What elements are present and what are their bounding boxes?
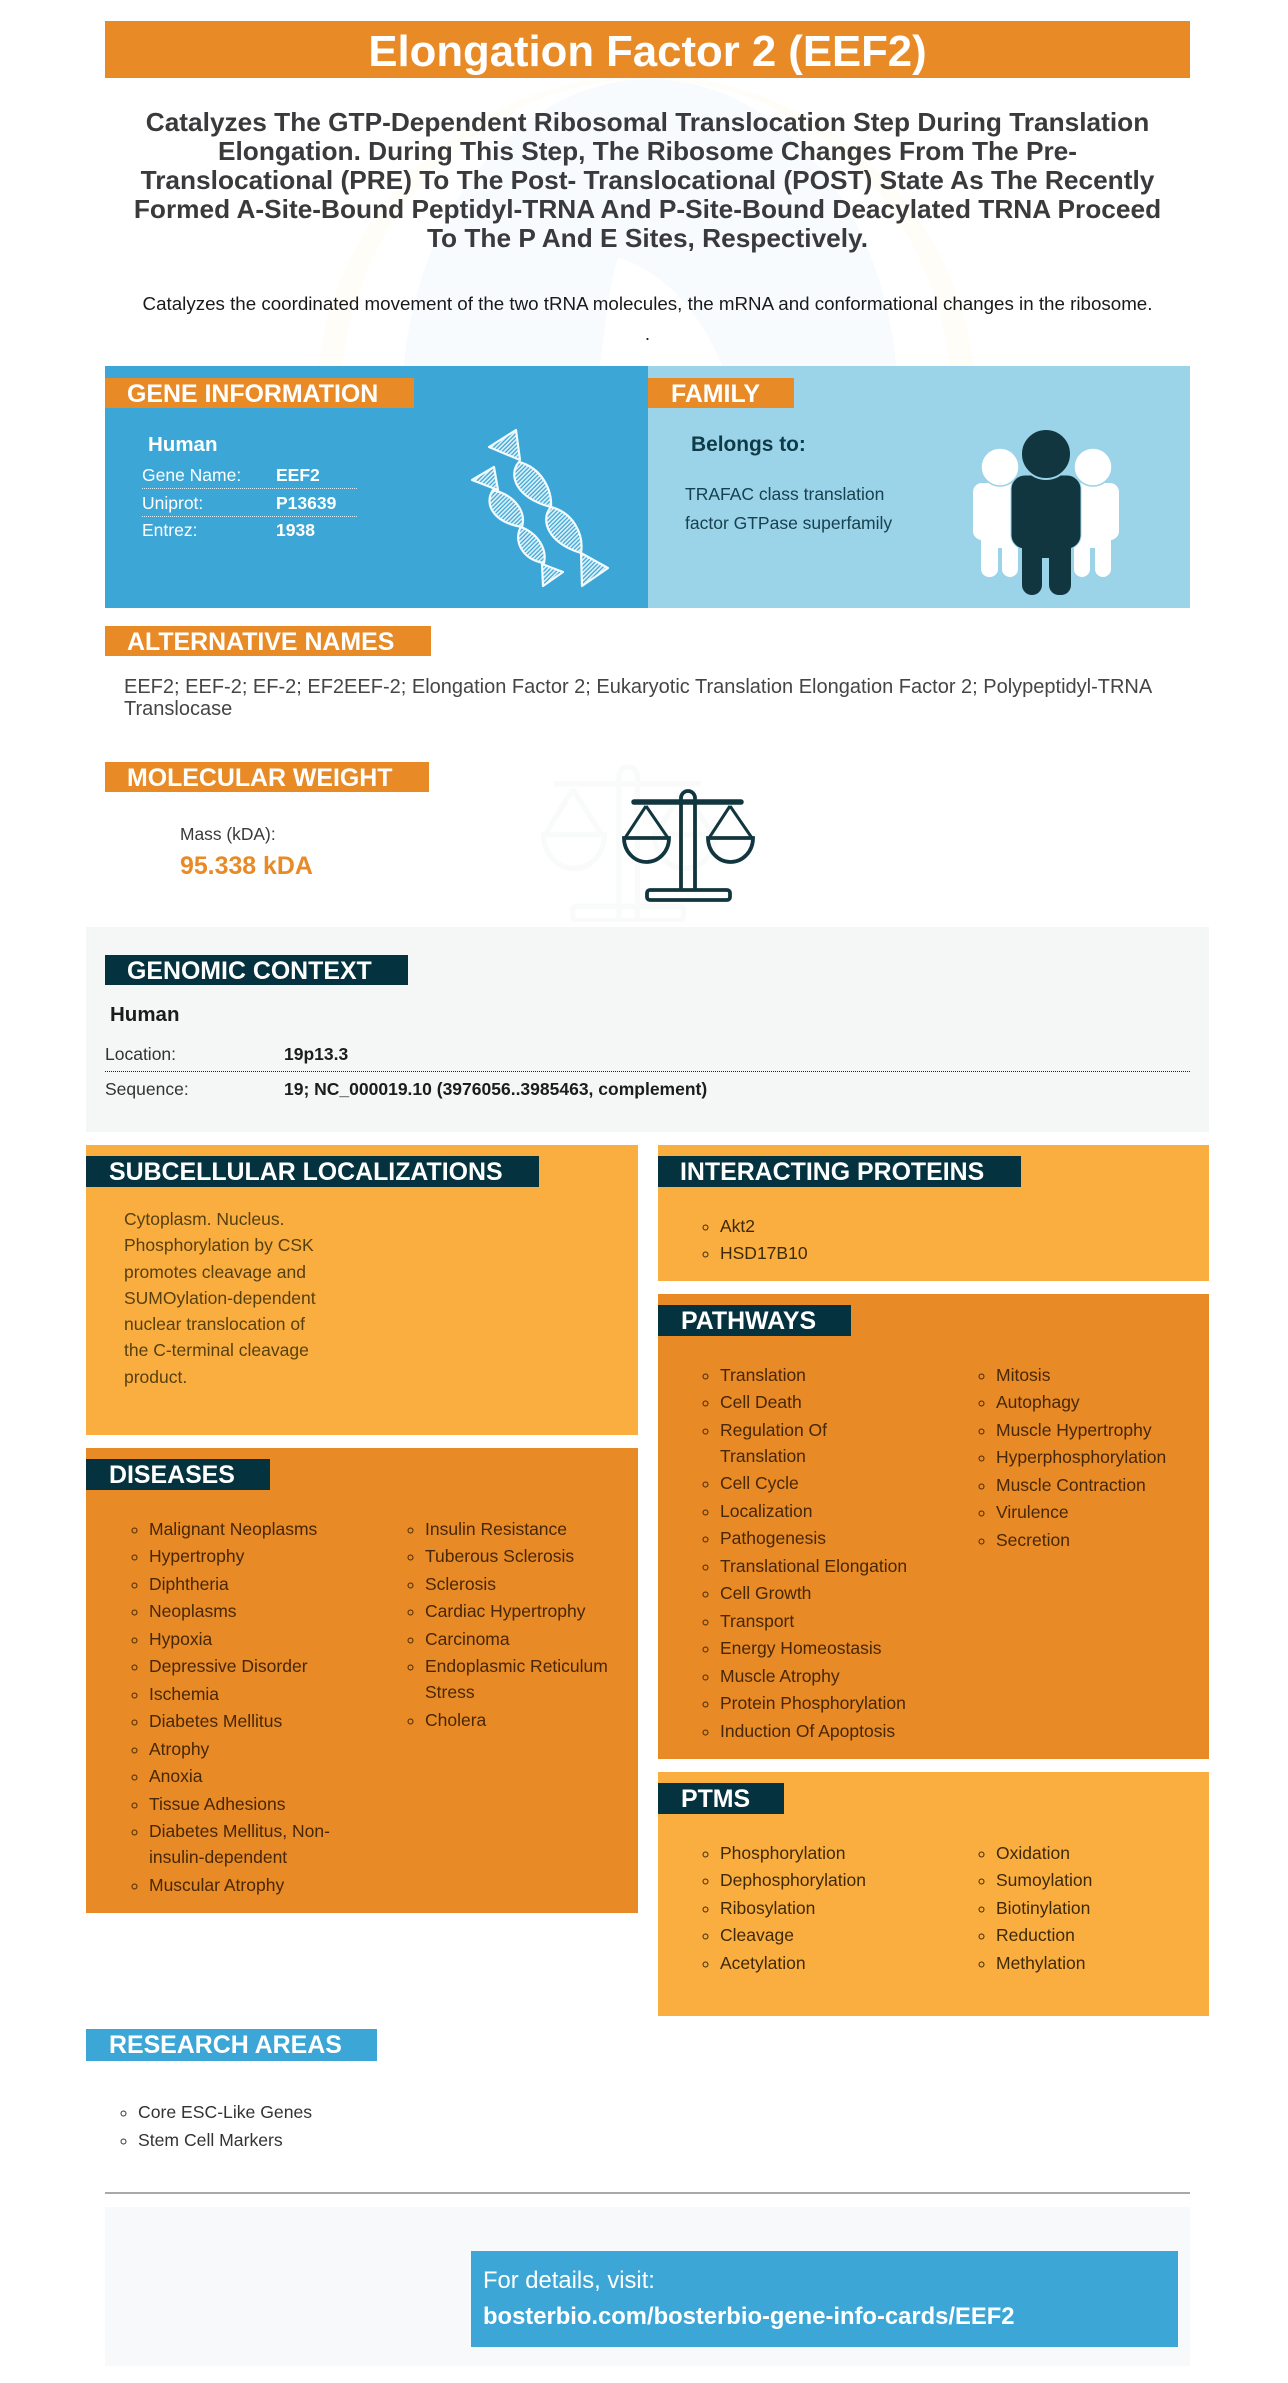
panel: genomic context — [86, 927, 1209, 1132]
pathways list column 2: Secretion — [996, 1530, 1070, 1550]
pathways list column 1: Energy Homeostasis — [720, 1638, 881, 1658]
heading: gene information: GENE INFORMATION — [127, 380, 378, 408]
pathways list column 2: Muscle Contraction — [996, 1474, 1146, 1494]
diseases list column 2 — [408, 1518, 608, 1730]
research areas list: Stem Cell Markers — [138, 2130, 283, 2150]
diseases list column 1: Anoxia — [149, 1766, 203, 1786]
heading: pathways — [658, 1305, 851, 1336]
subtitle description: Formed A-Site-Bound Peptidyl-TRNA And P-Site-Bound Deacylated TRNA Proceed — [134, 194, 1161, 224]
pathways list column 2: Mitosis — [996, 1364, 1050, 1384]
mass label: Mass (kDA): — [180, 824, 276, 844]
gene name row: EEF2 — [276, 465, 320, 485]
diseases list column 1: Malignant Neoplasms — [149, 1518, 317, 1538]
location row: Location: — [105, 1044, 176, 1064]
diseases list column 1: Ischemia — [149, 1684, 219, 1704]
heading: ptms — [658, 1783, 784, 1814]
localization text: nuclear translocation of — [124, 1314, 305, 1334]
diseases list column 2: Sclerosis — [425, 1574, 496, 1594]
pathways list column 2: Virulence — [996, 1502, 1069, 1522]
pathways list column 2: Hyperphosphorylation — [996, 1447, 1166, 1467]
ptms list column 2: Sumoylation — [996, 1870, 1092, 1890]
diseases list column 1: Depressive Disorder — [149, 1656, 308, 1676]
family description — [685, 484, 892, 532]
ptms list column 1: Acetylation — [720, 1952, 806, 1972]
diseases list column 1: Diphtheria — [149, 1574, 229, 1594]
diseases list column 1: Tissue Adhesions — [149, 1794, 286, 1814]
sequence row: Sequence: — [105, 1079, 189, 1099]
diseases list column 2: Cardiac Hypertrophy — [425, 1601, 585, 1621]
pathways list column 1: Cell Cycle — [720, 1473, 799, 1493]
heading: subcellular localizations: SUBCELLULAR LOCALIZATIONS — [109, 1158, 503, 1186]
subtitle description — [134, 107, 1161, 253]
interacting proteins list: HSD17B10 — [720, 1243, 808, 1263]
heading: genomic context: GENOMIC CONTEXT — [127, 957, 372, 985]
pathways list column 2: Muscle Hypertrophy — [996, 1420, 1152, 1440]
icon: balance scale — [622, 789, 755, 902]
localization text: Cytoplasm. Nucleus. — [124, 1209, 284, 1229]
pathways list column 1: Transport — [720, 1610, 794, 1630]
pathways list column 2 — [978, 1364, 1166, 1550]
diseases list column 2: Tuberous Sclerosis — [425, 1546, 574, 1566]
pathways list column 1: Induction Of Apoptosis — [720, 1720, 895, 1740]
icon: group of people — [973, 430, 1119, 595]
heading: pathways: PATHWAYS — [681, 1307, 816, 1335]
diseases list column 2: Endoplasmic Reticulum — [425, 1656, 608, 1676]
localization text: the C-terminal cleavage — [124, 1340, 309, 1360]
uniprot row: P13639 — [276, 493, 336, 513]
interacting proteins list — [702, 1216, 808, 1263]
family description: factor GTPase superfamily — [685, 512, 892, 532]
diseases list column 1: Diabetes Mellitus — [149, 1711, 282, 1731]
panel: interacting proteins — [658, 1145, 1209, 1281]
pathways list column 1 — [702, 1364, 907, 1740]
ptms list column 2: Methylation — [996, 1952, 1086, 1972]
heading: diseases — [86, 1459, 270, 1490]
heading: family: FAMILY — [671, 380, 760, 408]
section: alternative names — [105, 626, 1152, 720]
function paragraph: . — [645, 323, 650, 344]
alternative names text: EEF2; EEF-2; EF-2; EF2EEF-2; Elongation Factor 2; Eukaryotic Translation Elongation Factor 2; Polypeptidyl-TRNA Translocase — [124, 676, 1151, 720]
heading: family — [648, 378, 794, 408]
icon: dna helices — [470, 428, 610, 588]
family description: TRAFAC class translation — [685, 484, 884, 504]
ptms list column 2: Biotinylation — [996, 1898, 1090, 1918]
diseases list column 1: Muscular Atrophy — [149, 1874, 284, 1894]
research areas list: Core ESC-Like Genes — [138, 2102, 312, 2122]
mass value: 95.338 kDA — [180, 852, 313, 880]
panel: pathways — [658, 1294, 1209, 1759]
subtitle description: Translocational (PRE) To The Post- Translocational (POST) State As The Recently — [141, 165, 1154, 195]
heading: alternative names: ALTERNATIVE NAMES — [127, 628, 394, 656]
section: research areas — [86, 2029, 377, 2150]
belongs to label: Belongs to: — [691, 433, 806, 456]
panel: family — [648, 366, 1190, 608]
diseases list column 1: Hypertrophy — [149, 1546, 244, 1566]
pathways list column 1: Muscle Atrophy — [720, 1666, 840, 1686]
pathways list column 1: Translation — [720, 1446, 806, 1466]
subtitle description: Catalyzes The GTP-Dependent Ribosomal Translocation Step During Translation — [146, 107, 1149, 137]
ptms list column 2: Reduction — [996, 1925, 1075, 1945]
ptms list column 1: Ribosylation — [720, 1898, 815, 1918]
species label: Human — [110, 1003, 179, 1026]
uniprot row — [142, 493, 357, 517]
pathways list column 2: Autophagy — [996, 1392, 1080, 1412]
location row: 19p13.3 — [284, 1044, 348, 1064]
localization text — [124, 1209, 316, 1387]
gene name row — [142, 465, 357, 489]
diseases list column 1: Hypoxia — [149, 1628, 212, 1648]
pathways list column 1: Localization — [720, 1500, 812, 1520]
uniprot row: Uniprot: — [142, 493, 203, 513]
interacting proteins list: Akt2 — [720, 1216, 755, 1236]
entrez row — [142, 520, 315, 540]
localization text: promotes cleavage and — [124, 1262, 306, 1282]
diseases list column 1: Neoplasms — [149, 1601, 237, 1621]
sequence row: 19; NC_000019.10 (3976056..3985463, complement) — [284, 1079, 707, 1099]
callout: details link — [471, 2251, 1178, 2347]
localization text: Phosphorylation by CSK — [124, 1235, 314, 1255]
panel: footer — [105, 2207, 1190, 2366]
background watermark logo — [0, 78, 1288, 366]
diseases list column 1 — [132, 1518, 330, 1894]
panel: subcellular localizations — [86, 1145, 638, 1435]
location row — [105, 1044, 1190, 1072]
species label: Human — [148, 433, 217, 456]
heading: research areas: RESEARCH AREAS — [109, 2031, 342, 2059]
section: molecular weight — [105, 762, 755, 902]
ptms list column 1 — [702, 1842, 866, 1972]
localization text: product. — [124, 1367, 187, 1387]
panel: ptms — [658, 1772, 1209, 2016]
pathways list column 1: Pathogenesis — [720, 1528, 826, 1548]
panel: diseases — [86, 1448, 638, 1913]
pathways list column 1: Translational Elongation — [720, 1556, 907, 1576]
ptms list column 2: Oxidation — [996, 1842, 1070, 1862]
function paragraph: Catalyzes the coordinated movement of the two tRNA molecules, the mRNA and conformational changes in the ribosome. — [143, 293, 1152, 314]
heading: interacting proteins: INTERACTING PROTEINS — [680, 1158, 984, 1186]
diseases list column 2: Stress — [425, 1682, 475, 1702]
subtitle description: To The P And E Sites, Respectively. — [427, 223, 868, 253]
research areas list — [120, 2102, 312, 2150]
localization text: SUMOylation-dependent — [124, 1288, 316, 1308]
pathways list column 1: Translation — [720, 1364, 806, 1384]
ptms list column 2 — [978, 1842, 1092, 1972]
function paragraph — [143, 293, 1152, 344]
pathways list column 1: Regulation Of — [720, 1420, 827, 1440]
pathways list column 1: Protein Phosphorylation — [720, 1693, 906, 1713]
heading: molecular weight: MOLECULAR WEIGHT — [127, 764, 392, 792]
heading: diseases: DISEASES — [109, 1461, 235, 1489]
title banner: Elongation Factor 2 (EEF2) — [368, 27, 927, 76]
title banner — [105, 21, 1190, 78]
diseases list column 1: Diabetes Mellitus, Non- — [149, 1821, 330, 1841]
diseases list column 2: Carcinoma — [425, 1628, 510, 1648]
panel: gene information — [105, 366, 648, 608]
diseases list column 2: Insulin Resistance — [425, 1518, 567, 1538]
callout url: bosterbio.com/bosterbio-gene-info-cards/EEF2 — [483, 2303, 1015, 2330]
ptms list column 1: Dephosphorylation — [720, 1870, 866, 1890]
entrez row: 1938 — [276, 520, 315, 540]
gene name row: Gene Name: — [142, 465, 241, 485]
diseases list column 1: insulin-dependent — [149, 1847, 287, 1867]
ptms list column 1: Cleavage — [720, 1925, 794, 1945]
diseases list column 1: Atrophy — [149, 1738, 209, 1758]
callout label: For details, visit: — [483, 2267, 655, 2294]
ptms list column 1: Phosphorylation — [720, 1842, 846, 1862]
pathways list column 1: Cell Death — [720, 1392, 802, 1412]
heading: ptms: PTMS — [681, 1785, 750, 1813]
diseases list column 2: Cholera — [425, 1710, 486, 1730]
subtitle description: Elongation. During This Step, The Ribosome Changes From The Pre- — [218, 136, 1077, 166]
pathways list column 1: Cell Growth — [720, 1583, 811, 1603]
entrez row: Entrez: — [142, 520, 197, 540]
